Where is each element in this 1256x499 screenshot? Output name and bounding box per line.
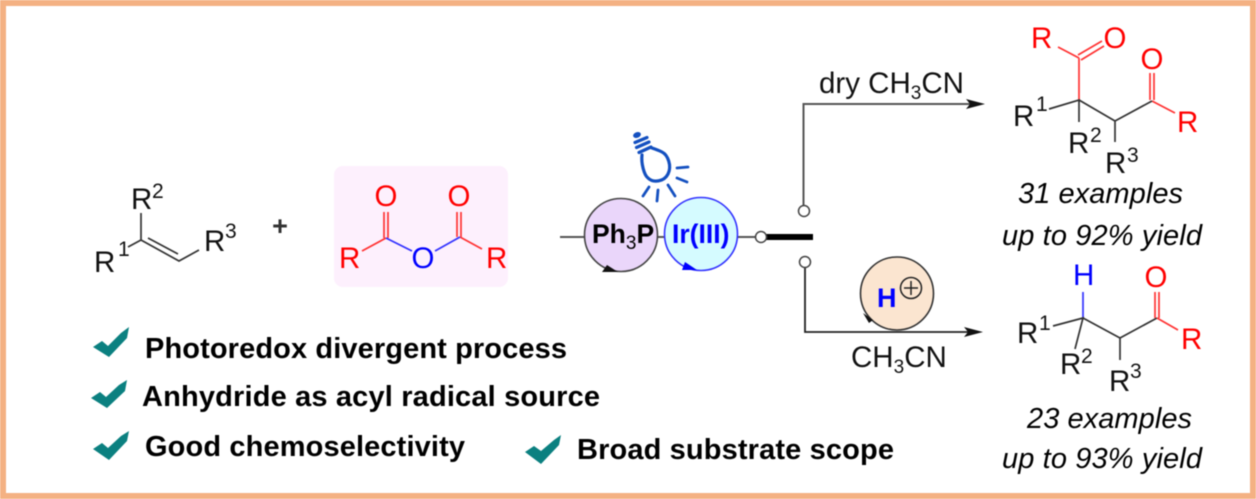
product: 1,4-diketone: O [1141, 43, 1163, 76]
panel: anhydride: R [486, 242, 507, 275]
alkene substrate [94, 180, 237, 279]
Ph3P catalyst circle [584, 198, 658, 272]
alkene substrate: 3 [225, 220, 237, 243]
Ph3P catalyst circle: P [636, 219, 654, 249]
panel: anhydride [334, 166, 508, 287]
H+ catalyst circle [860, 257, 934, 330]
product: 1,4-diketone: 2 [1090, 124, 1102, 147]
Ir(III) catalyst circle [664, 198, 738, 270]
yield text: top product: up to 92% yield [1002, 220, 1203, 252]
alkene substrate: R [94, 246, 115, 279]
label: dry CH3CN: dry CH [819, 67, 911, 100]
yield text: top product [1002, 178, 1203, 252]
product: 1,4-diketone: 1 [1036, 93, 1048, 116]
label: CH3CN: 3 [894, 357, 904, 378]
product: monoketone: O [1145, 261, 1167, 294]
catalyst line [560, 236, 755, 238]
plus sign: + [272, 211, 288, 241]
label: CH3CN: CH [851, 341, 894, 374]
panel: anhydride: R [339, 242, 360, 275]
product: monoketone: R [1109, 365, 1130, 398]
label: dry CH3CN: CN [921, 67, 964, 100]
arrow: upper pathway [798, 99, 985, 216]
switch [756, 232, 813, 242]
bullet: good chemoselectivity: Good chemoselectivity [145, 431, 465, 463]
alkene substrate: R [204, 225, 225, 258]
alkene substrate: 2 [152, 180, 164, 203]
product: 1,4-diketone: R [1013, 100, 1034, 133]
product: 1,4-diketone [1013, 22, 1198, 180]
product: monoketone: 2 [1081, 345, 1093, 368]
product: monoketone: R [1017, 317, 1038, 350]
product: monoketone: 3 [1130, 360, 1142, 383]
Ir(III) catalyst circle: Ir(III) [672, 219, 729, 249]
yield text: bottom product: 23 examples [1026, 403, 1192, 435]
product: monoketone: H [1073, 259, 1094, 292]
label: CH3CN: CN [904, 341, 947, 374]
Ph3P catalyst circle: Ph [592, 219, 626, 249]
product: 1,4-diketone: R [1031, 22, 1052, 55]
product: 1,4-diketone: R [1105, 147, 1126, 180]
icon: light bulb [632, 131, 688, 201]
yield text: bottom product: up to 93% yield [1002, 443, 1203, 475]
Ph3P catalyst circle: 3 [626, 233, 636, 254]
product: monoketone: R [1181, 323, 1202, 356]
alkene substrate: 1 [118, 238, 130, 261]
panel: anhydride: O [412, 242, 434, 275]
bullet: photoredox divergent process: Photoredox divergent process [145, 333, 567, 365]
product: 1,4-diketone: 3 [1127, 144, 1139, 167]
product: 1,4-diketone: R [1068, 127, 1089, 160]
label: dry CH3CN: 3 [911, 83, 921, 104]
product: monoketone [1017, 259, 1202, 398]
product: 1,4-diketone: O [1104, 22, 1126, 55]
product: 1,4-diketone: R [1177, 106, 1198, 139]
alkene substrate: R [131, 183, 152, 216]
arrow: lower pathway [800, 256, 983, 337]
panel: anhydride: O [448, 180, 470, 213]
yield text: bottom product [1002, 403, 1203, 475]
product: monoketone: 1 [1039, 312, 1051, 335]
bullet: broad substrate scope: Broad substrate scope [577, 434, 894, 466]
bullet: anhydride as acyl radical source: Anhydride as acyl radical source [142, 381, 600, 413]
product: monoketone: R [1060, 348, 1081, 381]
panel: anhydride: O [375, 180, 397, 213]
yield text: top product: 31 examples [1018, 178, 1183, 210]
H+ catalyst circle: H [877, 283, 896, 313]
